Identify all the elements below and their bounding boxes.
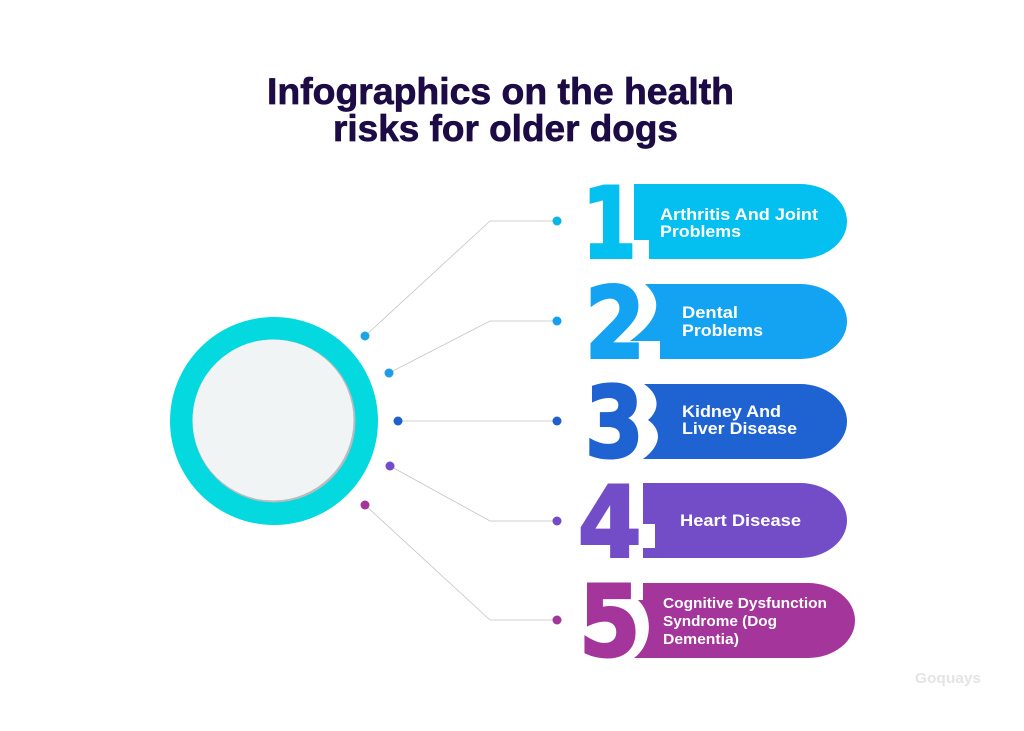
connector 1 [360, 216, 562, 340]
item 2: dental: Dental [682, 304, 738, 322]
item 4: heart disease: 4 [578, 466, 641, 580]
item 1: arthritis: 1 [582, 167, 637, 281]
item 4: heart disease: Heart Disease [680, 512, 801, 530]
title: Infographics on the health [267, 71, 734, 112]
item 5: cognitive dysfunction: 5 [579, 564, 640, 679]
item 5: cognitive dysfunction [579, 564, 855, 679]
item 4: heart disease [578, 466, 847, 580]
item 3: kidney and liver: Liver Disease [682, 420, 797, 438]
item 5: cognitive dysfunction: Dementia) [663, 632, 739, 648]
item 5: cognitive dysfunction: Syndrome (Dog [663, 614, 777, 630]
central circle [170, 317, 378, 525]
item 5: cognitive dysfunction: Cognitive Dysfunction [663, 596, 827, 612]
title [267, 71, 734, 149]
connector 4 [386, 462, 562, 526]
title: risks for older dogs [333, 108, 678, 149]
item 2: dental: 2 [585, 266, 645, 381]
item 1: arthritis: Arthritis And Joint [660, 206, 819, 224]
item 3: kidney and liver: Kidney And [682, 403, 781, 421]
connector 3 [394, 416, 562, 426]
item 2: dental [585, 266, 847, 381]
item 1: arthritis: Problems [660, 223, 741, 241]
item 2: dental: Problems [682, 322, 763, 340]
connector 2 [384, 316, 562, 378]
connector 5 [360, 500, 562, 624]
item 3: kidney and liver: 3 [585, 365, 644, 480]
watermark: Goquays [915, 671, 981, 687]
item 1: arthritis [582, 167, 847, 281]
item 3: kidney and liver [585, 365, 847, 480]
